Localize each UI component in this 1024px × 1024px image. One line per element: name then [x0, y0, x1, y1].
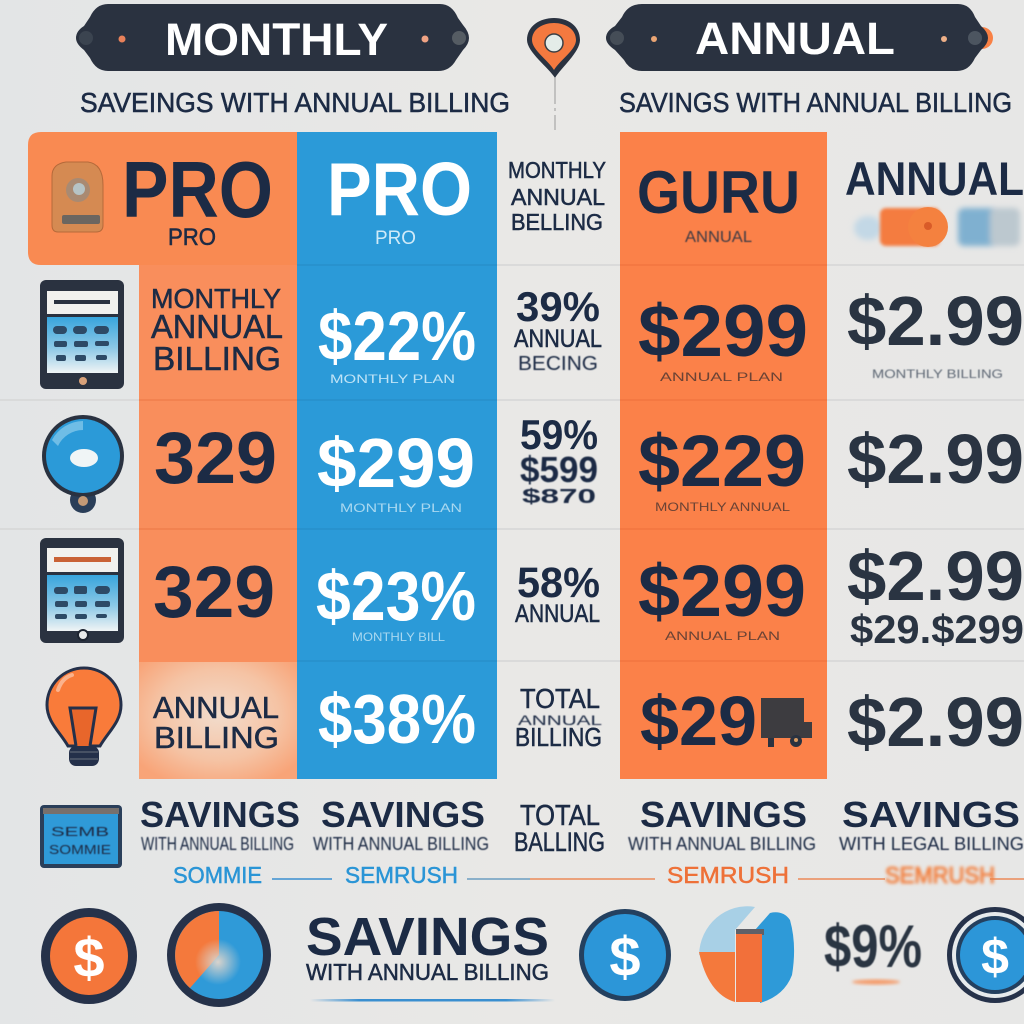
- footer: savings 3: WITH ANNUAL BILLING: [628, 834, 816, 854]
- panel: monthly header badge: [76, 4, 469, 71]
- panel: annual header badge: ANNUAL: [695, 13, 895, 64]
- footer: savings 2: WITH ANNUAL BILLING: [313, 834, 489, 854]
- number: guru row 4: $29: [640, 682, 757, 760]
- number: 329 row 3: 329: [153, 552, 275, 633]
- icon: semrush card: [40, 805, 122, 868]
- number: blue row 2: $299: [317, 424, 475, 502]
- footer: savings 1: SAVINGS: [140, 794, 300, 835]
- icon: calculator 2: [40, 538, 124, 643]
- icon: partial blue dollar coin: [947, 907, 1024, 1003]
- heading: pro orange: PRO: [122, 145, 273, 234]
- text: total billing: BILLING: [515, 722, 602, 752]
- icon: light bulb: [47, 668, 121, 766]
- heading: pro blue: PRO: [327, 147, 472, 231]
- text: center row 3: ANNUAL: [515, 600, 600, 628]
- label: pro small orange: PRO: [168, 224, 216, 251]
- number: blue row 4: $38%: [318, 680, 476, 758]
- footer: savings 1: [140, 794, 300, 854]
- text: total billing: [515, 683, 602, 752]
- footer: total billing: [514, 800, 605, 857]
- number: guru row 3: $299: [638, 551, 806, 632]
- label: semrush 2: SEMRUSH: [345, 862, 458, 888]
- text: center row 1: 39%: [516, 283, 600, 330]
- text: center row 3: 58%: [517, 559, 600, 607]
- text: center row 2: $870: [522, 486, 596, 508]
- number: right row 2: $2.99: [847, 420, 1024, 498]
- footer: total billing: TOTAL: [520, 800, 600, 832]
- icon: orange dollar coin: [41, 908, 137, 1004]
- text: center row 2: 59%: [520, 411, 598, 458]
- label: manual plan: ANNUAL PLAN: [665, 629, 780, 643]
- panel: row separators: [0, 265, 1024, 661]
- text: monthly annual billing: ANNUAL: [511, 184, 605, 210]
- label: semrush 3: SEMRUSH: [667, 862, 789, 888]
- footer: total billing: BALLING: [514, 827, 605, 857]
- footer: savings 3: [628, 794, 816, 854]
- text: monthly annual billing: BELLING: [511, 209, 603, 235]
- icon: semrush card: SOMMIE: [49, 842, 111, 857]
- label: monthly bill: MONTHLY BILL: [352, 630, 445, 644]
- text: total billing: TOTAL: [520, 683, 600, 714]
- panel: annual header badge: [606, 4, 993, 71]
- label: semrush 4: SEMRUSH: [885, 862, 995, 888]
- number: right row 1: $2.99: [847, 282, 1024, 360]
- heading: savings with annual billing: WITH ANNUAL BILLING: [306, 959, 549, 985]
- icon: blue dollar coin: [579, 909, 671, 1001]
- footer: savings 3: SAVINGS: [640, 794, 807, 835]
- number: 329 row 2: 329: [154, 418, 277, 499]
- number: guru row 2: $229: [638, 421, 806, 502]
- icon: partial blue dollar coin: $: [981, 929, 1009, 985]
- icon: blue button: [42, 415, 124, 513]
- label: monthly plan: MONTHLY PLAN: [330, 372, 455, 386]
- icon: bar chart: [699, 906, 794, 1003]
- number: right row 4: $2.99: [847, 683, 1024, 761]
- label: monthly plan row 2: MONTHLY PLAN: [340, 501, 462, 515]
- footer: savings 4: WITH LEGAL BILLING: [839, 834, 1024, 854]
- footer: savings 2: SAVINGS: [321, 794, 485, 835]
- number: right row 3 secondary: $29.$299: [850, 608, 1024, 652]
- number: right row 3: $2.99: [847, 537, 1024, 615]
- number: blue row 3: $23%: [316, 557, 476, 635]
- footer: savings 4: SAVINGS: [842, 794, 1020, 835]
- text: center row 1: [514, 283, 602, 375]
- icon: orange dollar coin: $: [73, 926, 105, 989]
- icon: calculator 1: [40, 280, 124, 389]
- divider: semrush rule: [40, 878, 1024, 880]
- text: annual billing orange: ANNUAL: [153, 690, 279, 725]
- text: center row 1: ANNUAL: [514, 325, 602, 353]
- icon: semrush card: SEMB: [51, 824, 109, 839]
- text: monthly annual billing: [508, 157, 606, 235]
- text: monthly annual billing orange: MONTHLY: [151, 283, 281, 314]
- number: guru row 1: $299: [638, 291, 808, 372]
- text: center row 2: $599: [520, 449, 598, 490]
- text: annual billing orange: [153, 690, 279, 755]
- text: total billing: ANNUAL: [518, 712, 602, 728]
- icon: truck: [761, 698, 812, 747]
- text: center row 1: BECING: [518, 353, 598, 375]
- footer: savings 4: [839, 794, 1024, 854]
- panel: orange pro header: [28, 132, 297, 265]
- text: annual billing orange: BILLING: [154, 720, 279, 755]
- number: 59 percent: $9%: [824, 913, 922, 980]
- label: semrush 1: SOMMIE: [173, 862, 262, 888]
- icon: location pin: [527, 18, 580, 130]
- text: monthly annual billing orange: ANNUAL: [151, 308, 283, 345]
- label: monthly annual: MONTHLY ANNUAL: [655, 500, 790, 514]
- label: annual small guru: ANNUAL: [685, 229, 752, 246]
- heading: savings with annual billing: [306, 907, 555, 1002]
- text: center row 3: [515, 559, 600, 628]
- panel: peach annual billing cell: [139, 662, 297, 779]
- text: center row 2: [520, 411, 598, 508]
- text: monthly annual billing: MONTHLY: [508, 157, 606, 183]
- label: pro small blue: PRO: [375, 228, 416, 249]
- subheading: monthly savings: SAVEINGS WITH ANNUAL BILLING: [80, 87, 510, 118]
- icon: pro camera: [52, 162, 103, 232]
- panel: monthly header badge: MONTHLY: [165, 14, 388, 65]
- label: monthly billing: MONTHLY BILLING: [872, 367, 1003, 381]
- heading: guru: GURU: [637, 159, 800, 226]
- footer: savings 2: [313, 794, 489, 854]
- heading: savings with annual billing: SAVINGS: [306, 907, 549, 967]
- label: annual plan: ANNUAL PLAN: [660, 370, 783, 384]
- icon: annual blurred pill: [854, 207, 1020, 247]
- panel: cell lines: [139, 265, 827, 661]
- text: monthly annual billing orange: [151, 283, 283, 377]
- panel: orange column: [139, 265, 297, 662]
- icon: blue dollar coin: $: [609, 925, 641, 988]
- text: monthly annual billing orange: BILLING: [153, 340, 281, 377]
- panel: guru orange column: [620, 132, 827, 779]
- icon: pie chart: [167, 903, 271, 1007]
- footer: savings 1: WITH ANNUAL BILLING: [141, 834, 294, 854]
- number: blue row 1: $22%: [318, 297, 476, 375]
- panel: blue column: [297, 132, 497, 779]
